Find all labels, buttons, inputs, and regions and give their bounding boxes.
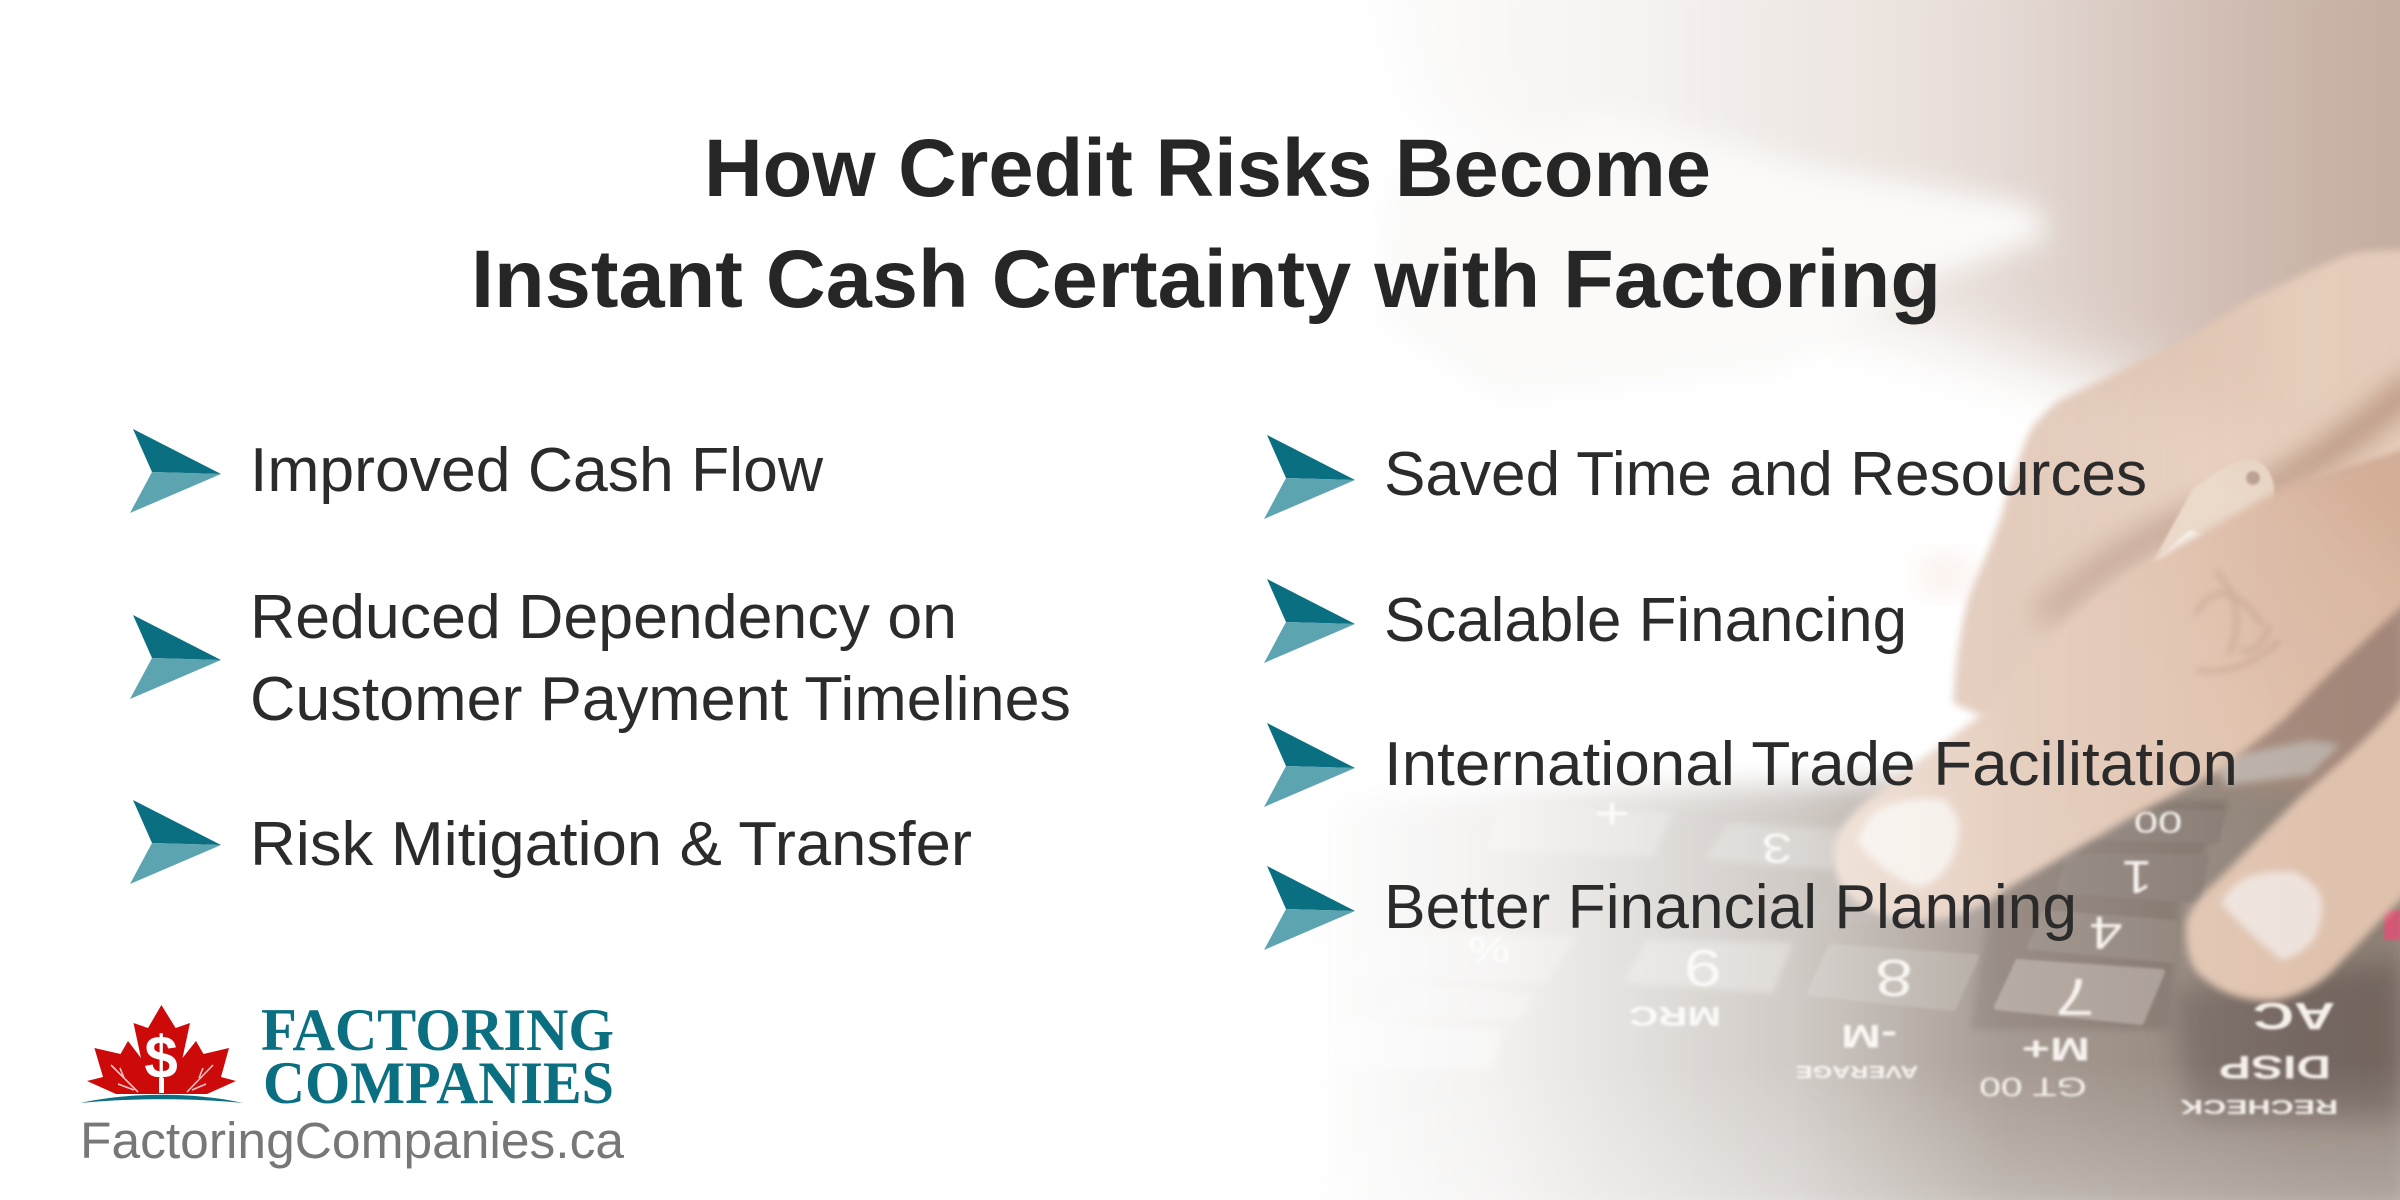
item: Improved Cash Flow: Improved Cash Flow [250, 436, 823, 505]
key labels (upside-down photo detail) [1598, 803, 2338, 1116]
item: Scalable Financing [1264, 579, 1907, 663]
finger shadow crease [2040, 380, 2400, 620]
item: Risk Mitigation & Transfer: Risk Mitigation & Transfer [250, 810, 972, 879]
middle finger [1833, 445, 2400, 921]
website url: FactoringCompanies.ca [80, 1112, 625, 1169]
grey patch between fingers [2215, 740, 2340, 785]
masked photo layers [1320, 250, 2400, 1200]
calculator body [1412, 763, 2400, 1200]
item: Better Financial Planning: Better Financial Planning [1384, 873, 2077, 942]
key labels (upside-down photo detail): -M [1841, 1018, 1897, 1054]
shaded hand behind fingers [2240, 601, 2400, 794]
key labels (upside-down photo detail): GT 00 [1979, 1072, 2087, 1101]
key labels (upside-down photo detail): % [1468, 929, 1510, 970]
logo: Factoring Companies [80, 997, 625, 1169]
key labels (upside-down photo detail): RECHECK [2179, 1096, 2338, 1118]
key labels (upside-down photo detail): DISP [2219, 1049, 2331, 1085]
pale paper highlight [1380, 112, 2050, 400]
item: International Trade Facilitation: International Trade Facilitation [1384, 730, 2238, 799]
calculator keys, far side [1606, 815, 1838, 992]
dark calculator shadow near AC [2170, 960, 2400, 1120]
list: right column [1264, 435, 2238, 950]
key labels (upside-down photo detail): AC [2253, 994, 2335, 1037]
dark gaps between keys [1970, 800, 2230, 1030]
item: Better Financial Planning [1264, 866, 2077, 950]
red button edge [2384, 910, 2400, 940]
key labels (upside-down photo detail): MRC [1629, 1001, 1721, 1031]
middle finger nail [1857, 798, 1959, 887]
key labels (upside-down photo detail): 7 [2055, 967, 2095, 1025]
title [471, 123, 1941, 325]
pencil [2153, 460, 2274, 562]
key labels (upside-down photo detail): 1 [2122, 851, 2152, 903]
item: Reduced Dependency on Customer Payment Timelines [130, 583, 1071, 734]
item: Reduced Dependency on Customer Payment Timelines: Reduced Dependency on [250, 583, 957, 652]
logo wordmark: COMPANIES [263, 1050, 614, 1116]
title: Instant Cash Certainty with Factoring [471, 234, 1941, 325]
key labels (upside-down photo detail): AVERAGE [1796, 1062, 1918, 1082]
bottom fade [0, 1060, 2400, 1200]
list: left column [130, 429, 1071, 884]
faint coloured smear [1915, 553, 1975, 597]
key labels (upside-down photo detail): 8 [1875, 949, 1913, 1007]
item: Risk Mitigation & Transfer [130, 800, 972, 884]
blurred pink backdrop [1350, 0, 2400, 620]
item: Improved Cash Flow [130, 429, 823, 513]
icon: red maple leaf with dollar sign: $ [144, 1024, 178, 1091]
key labels (upside-down photo detail): 9 [1684, 939, 1722, 997]
logo wordmark: FACTORING [261, 997, 614, 1063]
knuckle creases [2195, 570, 2280, 671]
key labels (upside-down photo detail): 00 [2134, 806, 2182, 839]
key labels (upside-down photo detail): + [1594, 789, 1630, 838]
calculator keys, near side [1810, 813, 2221, 1022]
logo wordmark [261, 997, 614, 1116]
item: Reduced Dependency on Customer Payment Timelines: Customer Payment Timelines [250, 665, 1071, 734]
item: Saved Time and Resources: Saved Time and Resources [1384, 440, 2147, 509]
item: Scalable Financing: Scalable Financing [1384, 586, 1907, 655]
key labels (upside-down photo detail): 3 [1762, 825, 1792, 871]
key labels (upside-down photo detail): 4 [2089, 907, 2123, 958]
icon: red maple leaf with dollar sign [80, 1005, 243, 1103]
thumb nail [2221, 871, 2322, 960]
thumb [2186, 680, 2400, 1001]
key labels (upside-down photo detail): M+ [2022, 1031, 2090, 1067]
upper finger [1953, 250, 2400, 720]
title: How Credit Risks Become [704, 123, 1711, 214]
